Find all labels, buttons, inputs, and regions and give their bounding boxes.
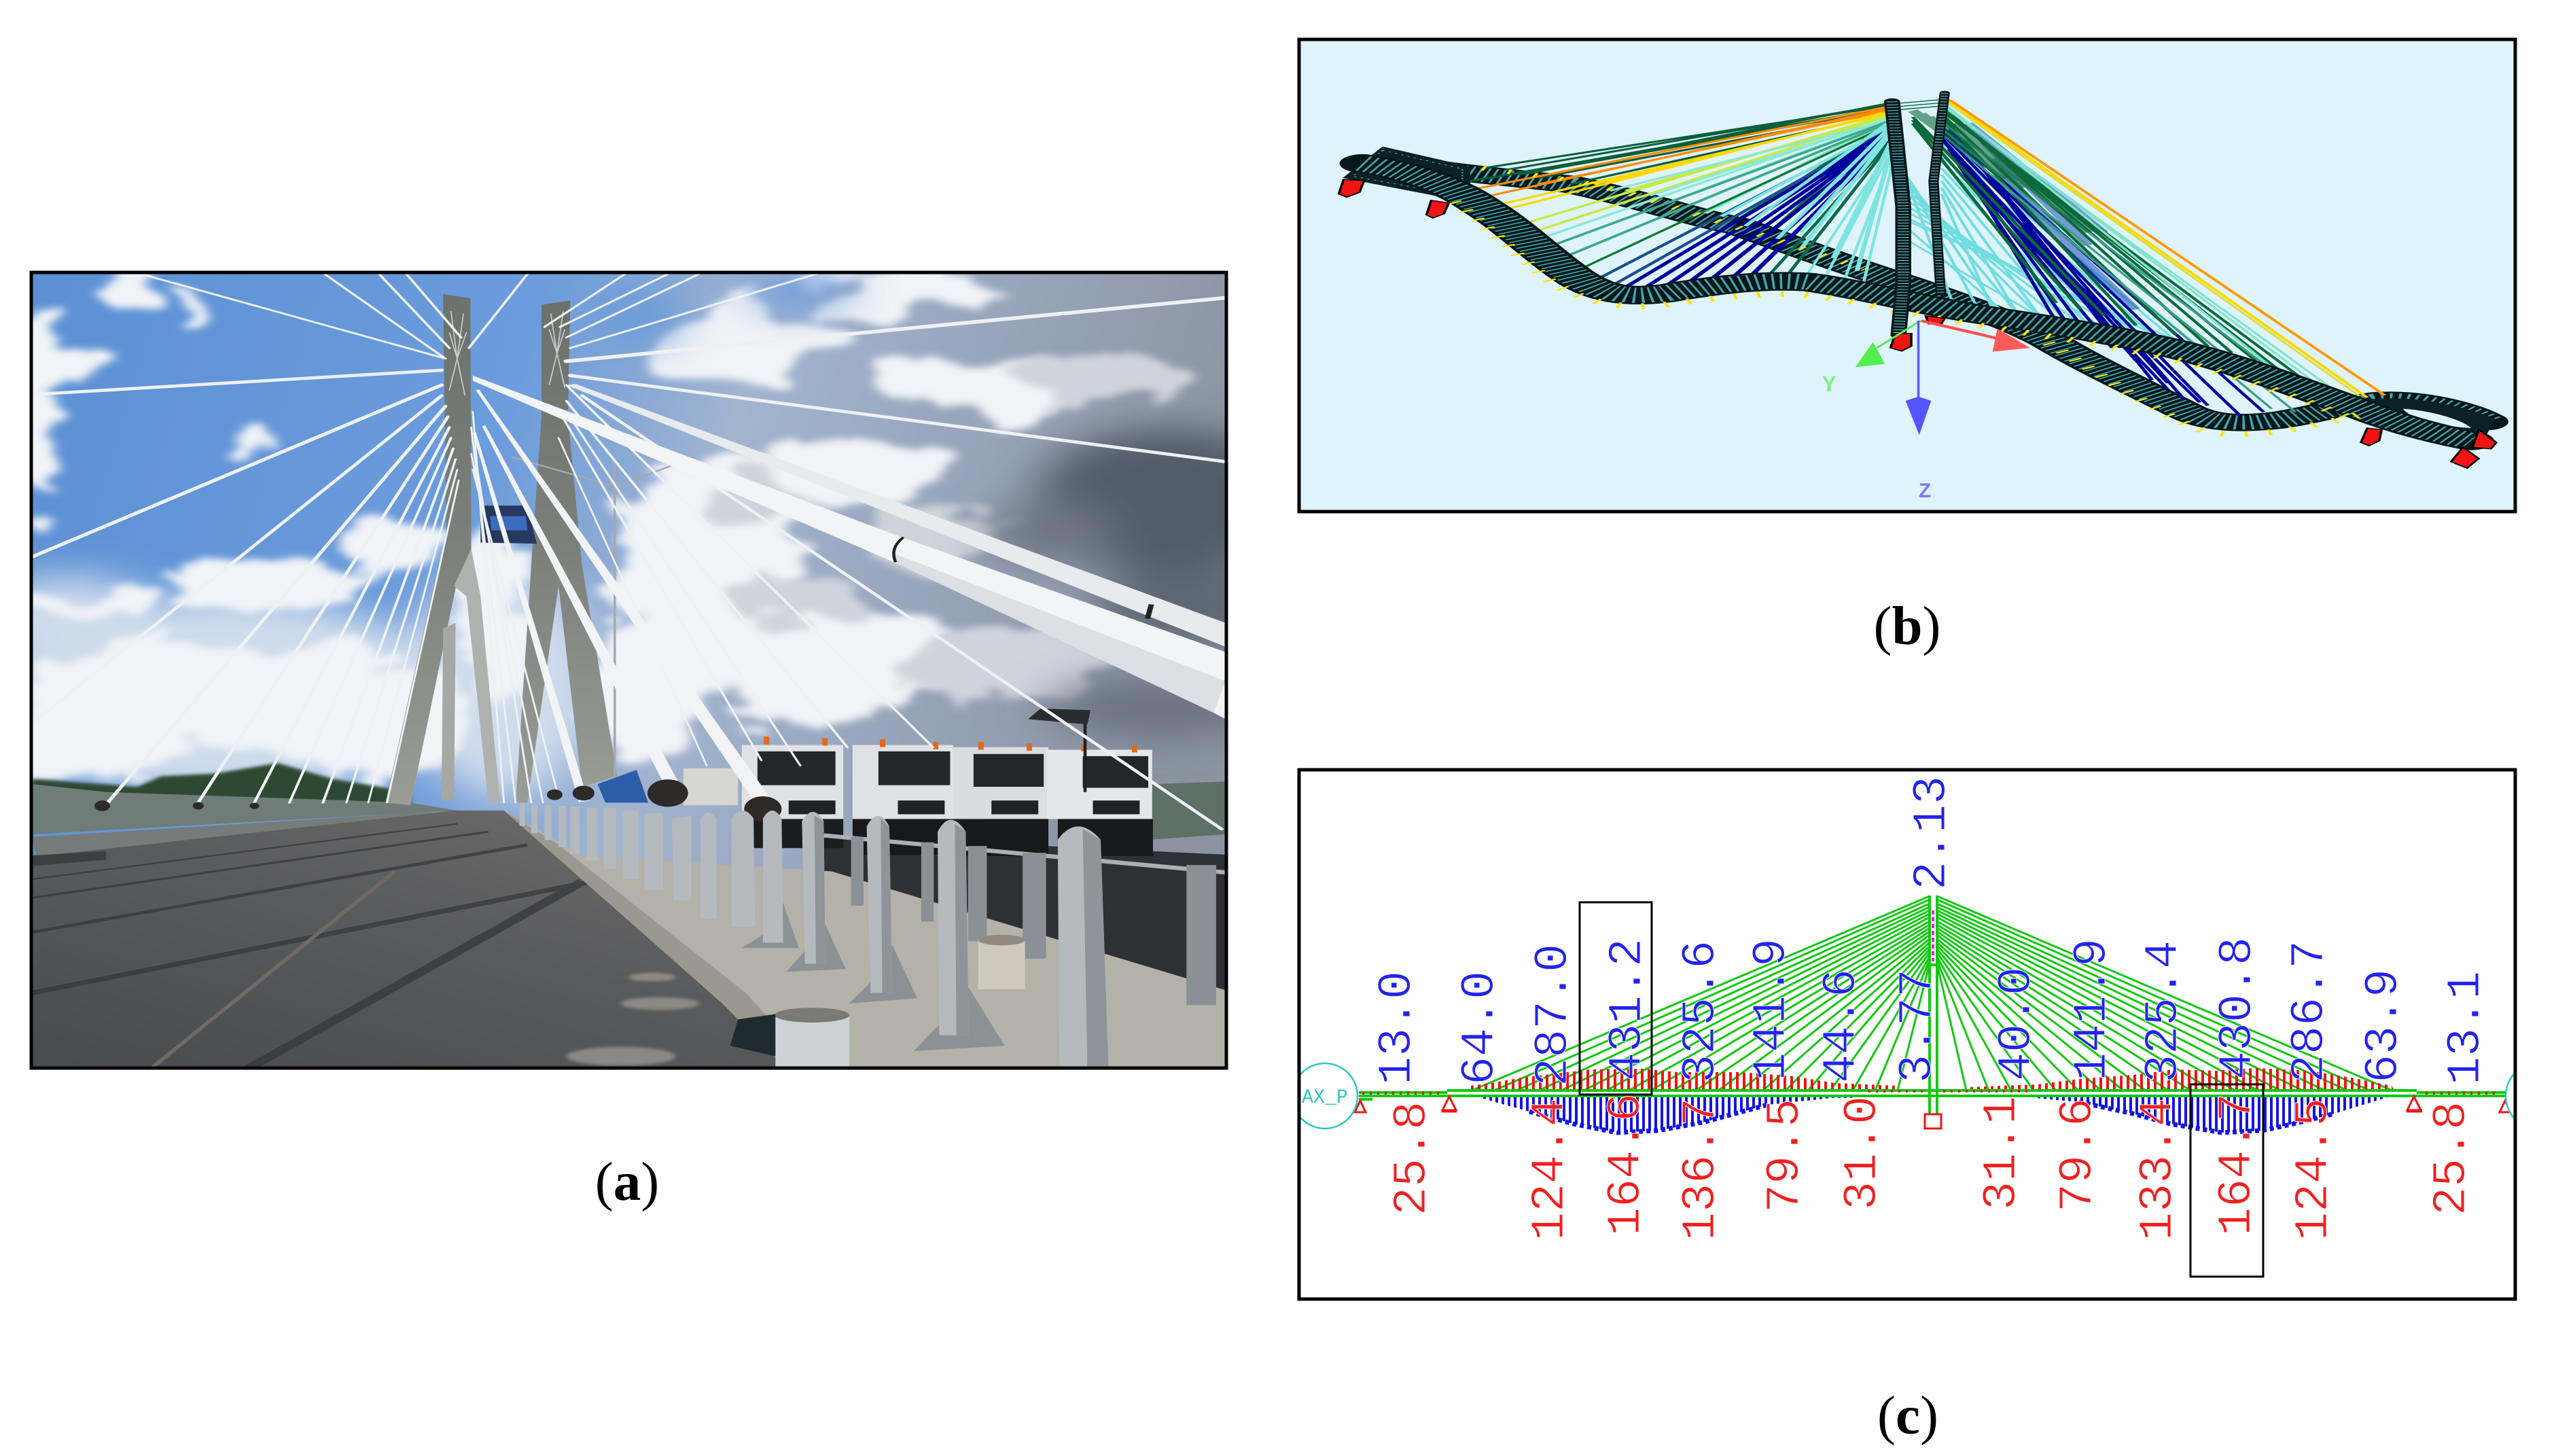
blue envelope — [1529, 1102, 2335, 1133]
near deck girder — [1363, 164, 2471, 441]
front railing posts — [520, 804, 1108, 1067]
tower base square — [1925, 1114, 1941, 1129]
blue value labels: 287.0 — [1527, 944, 1581, 1086]
panel (c) background — [1299, 769, 2516, 1299]
blue value labels: 430.8 — [2212, 937, 2265, 1080]
lamp post — [512, 457, 695, 798]
blue value labels: 63.9 — [2358, 969, 2411, 1083]
blue value labels: 13.1 — [2440, 971, 2493, 1085]
truck 1 — [742, 736, 843, 848]
blue tarpaulin — [598, 770, 648, 802]
left axis bubble AX_P — [1292, 1063, 1357, 1129]
axis label Z: Z — [1919, 480, 1931, 502]
axis Y: green arrow — [1856, 321, 1921, 367]
panel (b): 3D finite element model — [1296, 37, 2518, 513]
tower-top cable anchors — [449, 311, 565, 395]
blue value labels — [1371, 776, 2493, 1086]
blue value labels: 325.4 — [2137, 940, 2191, 1083]
red value labels: 133.4 — [2132, 1098, 2186, 1241]
green stay cables, left fan — [1472, 896, 1930, 1090]
red bridge supports — [1338, 179, 2496, 468]
panel (b) frame — [1299, 39, 2515, 512]
axis label Y: Y — [1822, 372, 1836, 396]
support triangles — [1355, 1097, 2510, 1112]
blue value labels: 325.6 — [1675, 940, 1728, 1083]
blue value labels: 40.0 — [1991, 967, 2044, 1081]
concrete walkway — [504, 811, 1243, 1087]
post shaded sides — [815, 816, 1108, 1067]
deck lines — [1359, 1090, 2507, 1099]
gravel patches — [567, 973, 699, 1066]
yellow load arrows along deck — [1455, 202, 2351, 419]
far tree line — [32, 763, 410, 808]
grey cloud shading — [707, 353, 1190, 703]
panel (c) frame — [1299, 770, 2515, 1299]
blue value labels: 431.2 — [1601, 938, 1655, 1081]
highlight box, left span — [1580, 902, 1652, 1095]
thicker lower stays — [473, 389, 769, 802]
sign board — [480, 505, 537, 544]
red tick marks, left — [1471, 1068, 1896, 1093]
left guard rail — [32, 812, 442, 857]
red tick marks, right — [1970, 1068, 2395, 1093]
panel (c): axial force and moment diagram — [1292, 769, 2556, 1299]
red value labels: 124.4 — [1524, 1098, 1578, 1241]
red value labels: 124.5 — [2288, 1098, 2341, 1241]
floodlight — [1028, 709, 1090, 792]
panel (a) frame — [31, 272, 1226, 1068]
left end block of deck — [1343, 147, 1470, 197]
noise barrier left — [32, 784, 457, 834]
far right barrier — [1152, 781, 1226, 840]
tower mast — [1930, 895, 1937, 1114]
truck tipper body — [684, 768, 738, 805]
thin stay cables — [32, 274, 1226, 829]
red value labels: 79.5 — [1759, 1099, 1813, 1213]
caption (a): (a) — [595, 1151, 659, 1212]
blue value labels: 286.7 — [2284, 940, 2337, 1083]
red value labels: 164.6 — [1600, 1093, 1654, 1236]
highlight box, right span — [2190, 1084, 2263, 1277]
red value labels: 136.7 — [1675, 1098, 1728, 1241]
blue value labels: 3.77 — [1892, 969, 1945, 1083]
blue bending diagram, right span — [2031, 1094, 2398, 1135]
truck 3 — [953, 742, 1048, 856]
red value labels — [1386, 1093, 2479, 1241]
dark carriageway behind railing — [800, 834, 1243, 1009]
towers — [385, 294, 617, 805]
red value labels: 25.8 — [2426, 1101, 2479, 1215]
dark storm clouds — [601, 274, 1224, 750]
blue value labels: 64.0 — [1454, 971, 1508, 1085]
right axis bubble — [2506, 1062, 2556, 1130]
small red and blue dots near abutments — [1362, 1091, 2500, 1093]
blue value labels: 141.9 — [2066, 938, 2120, 1081]
pale lower sky haze — [0, 565, 598, 798]
sky — [33, 274, 1224, 870]
white bucket on walkway — [978, 935, 1025, 989]
paint bucket — [730, 1008, 849, 1072]
caption (c): (c) — [1877, 1385, 1938, 1446]
caption (b): (b) — [1873, 595, 1941, 656]
road surface — [33, 811, 776, 1067]
tower legs — [1892, 93, 1945, 335]
panel (a): bridge photograph — [33, 274, 1224, 1067]
green stay cables, right fan — [1937, 896, 2392, 1090]
red value labels: 25.8 — [1386, 1101, 1440, 1215]
magenta tower dots — [1932, 910, 1934, 961]
far deck girder — [1387, 162, 2487, 423]
blue value labels: 2.13 — [1906, 776, 1959, 890]
handrail — [823, 836, 1226, 872]
blue value labels: 141.9 — [1745, 938, 1799, 1081]
left span stay cables — [1455, 103, 1893, 296]
axis Z: blue arrow — [1906, 321, 1931, 435]
blue value labels: 44.6 — [1815, 969, 1869, 1083]
red value labels: 31.0 — [1836, 1096, 1890, 1210]
road shadows and lane line — [32, 823, 590, 1087]
red value labels: 79.6 — [2052, 1098, 2106, 1212]
anchor discs — [94, 779, 781, 821]
truck 2 — [853, 739, 953, 855]
clouds — [0, 271, 1073, 787]
rear railing posts — [851, 837, 1216, 1005]
red value labels: 164.7 — [2211, 1093, 2265, 1236]
thick foreground stay cables — [473, 376, 1243, 728]
truck 4 — [1047, 745, 1153, 856]
axis X: red arrow — [1921, 321, 2030, 352]
red value labels: 31.1 — [1976, 1096, 2029, 1210]
blue bending diagram, left span — [1471, 1094, 1855, 1135]
model background — [1296, 37, 2518, 513]
right span stay cables — [1889, 99, 2385, 415]
left axis bubble AX_P: AX_P — [1302, 1086, 1348, 1109]
right end block of deck — [2351, 398, 2495, 448]
post base flares — [742, 903, 1005, 1051]
blue value labels: 13.0 — [1371, 971, 1425, 1085]
